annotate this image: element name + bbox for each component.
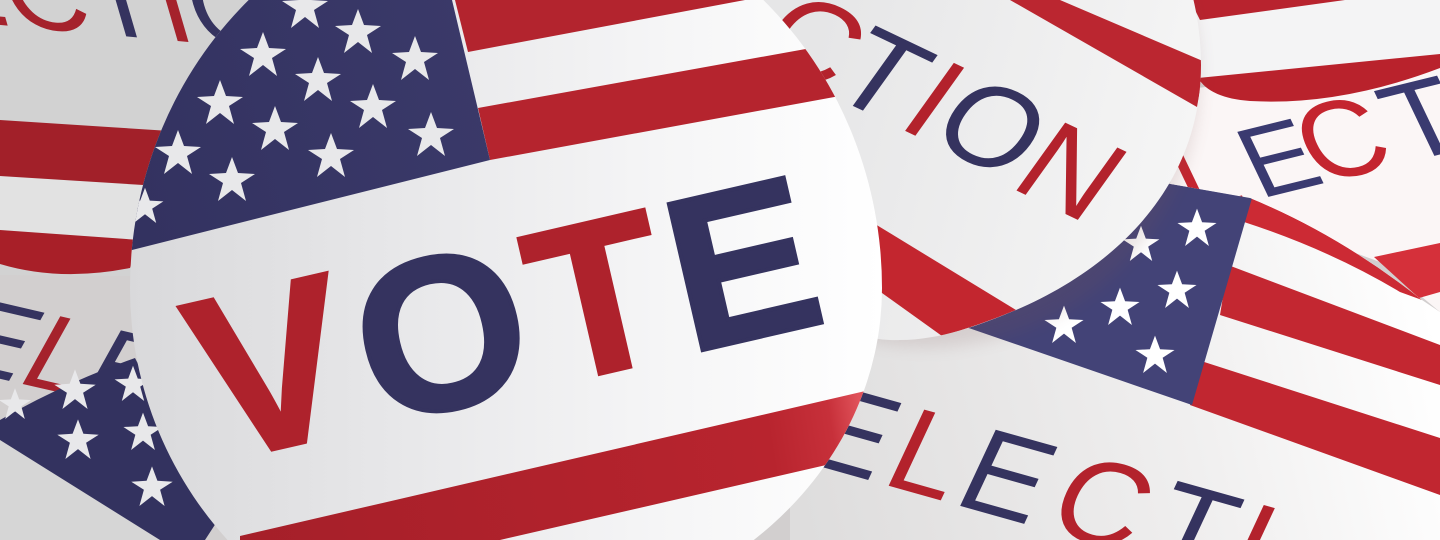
flag stripes <box>1244 198 1422 300</box>
text: VOTE: T <box>506 164 690 431</box>
stripe: upper red <box>1010 0 1205 107</box>
badge: main VOTE <box>100 0 900 540</box>
text: VOTE: O <box>332 196 551 471</box>
text: CTION: N <box>992 97 1151 245</box>
text: VOTE: V <box>166 225 375 512</box>
flag canton <box>0 358 218 540</box>
text: ELECTION right: E <box>1220 97 1338 220</box>
stripes: top left <box>0 120 170 186</box>
text: ELECTION right: C <box>1274 72 1410 207</box>
stars <box>0 366 173 506</box>
shadow: middle badge <box>656 0 1200 347</box>
stripe: second red <box>478 49 835 160</box>
stripe: top red <box>455 0 745 52</box>
stars <box>127 0 454 223</box>
badge: middle ELECTION <box>764 0 1201 340</box>
badge: bottom left <box>0 276 218 540</box>
stripe: bottom red <box>240 391 864 540</box>
text: VOTE: E <box>644 130 841 399</box>
text: ELECTION right: L <box>1152 117 1259 237</box>
badge: bottom right <box>784 180 1440 540</box>
badge: right with ELECTION text <box>1148 53 1440 312</box>
stars <box>1044 209 1217 373</box>
stripe: lower red <box>875 224 1016 336</box>
badge: top left <box>0 0 300 276</box>
shape: red corner <box>1374 243 1440 298</box>
flag canton <box>132 0 490 250</box>
flag canton <box>960 183 1252 405</box>
badge: top right <box>1190 0 1440 102</box>
area: lower left white <box>0 440 160 540</box>
